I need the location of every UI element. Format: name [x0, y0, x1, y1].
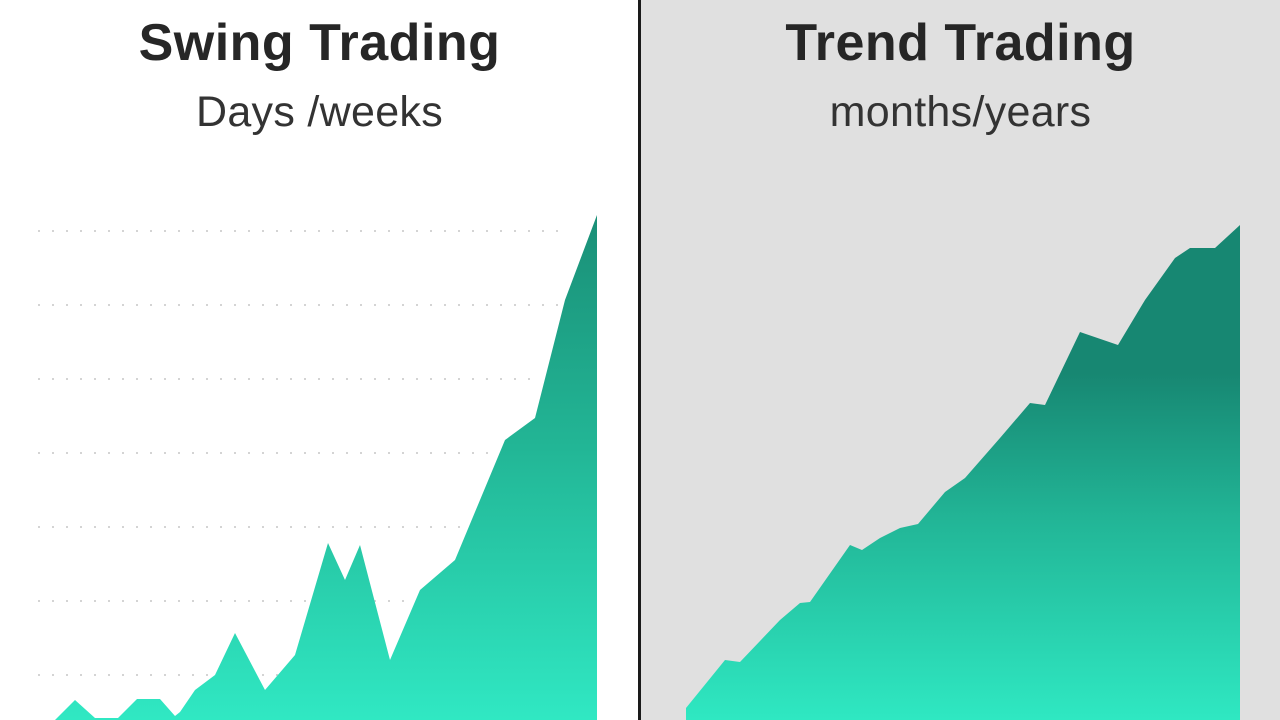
subtitle: months years: months/years [830, 88, 1091, 136]
chart: trend trading area chart [686, 225, 1240, 720]
subtitle: days weeks: Days /weeks [196, 88, 443, 136]
panel: swing trading [0, 0, 639, 720]
title: trend trading: Trend Trading [785, 14, 1136, 72]
panel: trend trading [641, 0, 1280, 720]
divider [638, 0, 641, 720]
chart: swing trading area chart [38, 215, 597, 720]
title: swing trading: Swing Trading [139, 14, 500, 72]
